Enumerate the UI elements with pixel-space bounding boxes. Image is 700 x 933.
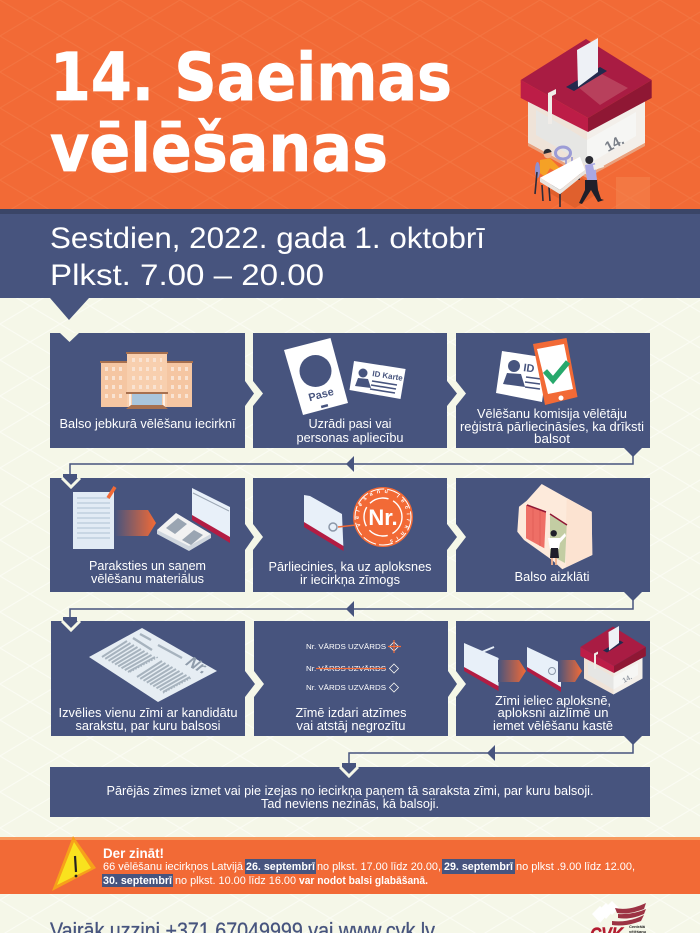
notice text: no plkst. 17.00 līdz 20.00, (317, 861, 441, 873)
arrow: gradient (558, 660, 582, 682)
step 7 panel: choose a list: sarakstu, par kuru balsosi (76, 719, 220, 733)
notice text: 29. septembrī (444, 861, 514, 873)
step 8 text: Zīmē izdari atzīmes (296, 706, 406, 720)
notice heading: Der zināt! (103, 846, 164, 861)
title: 14. Saeimas (50, 39, 452, 116)
step 9 panel: envelope into ballot box (456, 621, 650, 736)
notice text: var nodot balsi glabāšanā. (299, 875, 428, 887)
notice text (102, 859, 635, 887)
arrow: step 5 to 6 (447, 524, 466, 550)
icon: warning triangle (52, 836, 96, 891)
candidate rows with marks (306, 640, 401, 692)
logo: CVK (590, 901, 647, 933)
step 3 panel: commission checks the register: balsot (534, 432, 571, 446)
connector: row 2 to row 3 (63, 592, 642, 621)
step 9 text: Zīmi ieliec aploksnē, (495, 694, 611, 708)
step 3 text: Vēlēšanu komisija vēlētāju (477, 407, 627, 421)
step 4 panel: sign and receive materials: vēlēšanu materiālus (91, 572, 204, 586)
icon: passport: Pase (307, 386, 335, 404)
step 9 panel: envelope into ballot box: aploksni aizlīmē un (498, 706, 608, 720)
step 9 panel: envelope into ballot box: iemet vēlēšanu kastē (493, 719, 613, 733)
date and time banner (0, 209, 700, 320)
step 2 text: Uzrādi pasi vai (308, 417, 392, 431)
notice band (0, 836, 700, 894)
icon: small ballot box (580, 626, 646, 694)
icon: polling station building (100, 352, 193, 409)
step 5 panel: check the stamp (253, 478, 447, 592)
icon: ID card (496, 351, 548, 402)
step 3 panel: commission checks the register: reģistrā pārliecināsies, ka drīksti (460, 420, 644, 434)
step 5 panel: check the stamp: ir iecirkņa zīmogs (300, 573, 400, 587)
date and time banner: Sestdien, 2022. gada 1. oktobrī (50, 222, 486, 255)
notice text: no plkst .9.00 līdz 12.00, (516, 861, 635, 873)
arrow: step 7 to 8 (245, 671, 264, 697)
final note panel: Tad neviens nezinās, kā balsoji. (261, 797, 439, 811)
icon: stamp magnifier: Nr. (368, 505, 398, 530)
icon: passport (284, 338, 348, 415)
candidate rows with marks: Nr. VĀRDS UZVĀRDS (306, 665, 386, 673)
step 5 text: Pārliecinies, ka uz aploksnes (268, 560, 432, 574)
notice text: 30. septembrī (103, 875, 173, 887)
step 6 panel: vote in private (456, 478, 650, 592)
arrow: step 2 to 3 (447, 381, 466, 406)
icon: stamp magnifier: vēlēšanu iecirknis (356, 490, 410, 543)
step 2 panel: show passport or ID: personas apliecību (296, 431, 404, 445)
header panel (0, 0, 700, 209)
final note panel (50, 767, 650, 817)
arrow: gradient (115, 510, 156, 536)
candidate rows with marks: Nr. VĀRDS UZVĀRDS (306, 684, 386, 692)
illustration: ballot box with election staff (521, 38, 652, 208)
arrow: gradient (498, 660, 526, 682)
arrow: step 4 to 5 (245, 524, 263, 550)
icon: ID card: ID (523, 362, 535, 376)
icon: ballots and envelope (157, 488, 230, 551)
step 8 panel: mark candidates: vai atstāj negrozītu (296, 719, 406, 733)
step 1 text: Balso jebkurā vēlēšanu iecirknī (60, 417, 236, 431)
icon: ID card: ID Karte (372, 369, 404, 383)
icon: small ballot box: 14. (622, 674, 634, 685)
icon: sealed envelope (527, 647, 561, 692)
illustration: ballot box with election staff: 14. (602, 131, 627, 155)
connector: row 3 to final note (342, 736, 642, 767)
step 7 text: Izvēlies vienu zīmi ar kandidātu (58, 706, 238, 720)
notice text: no plkst. 10.00 līdz 16.00 (175, 875, 296, 887)
icon: candidate list sheet: Nr. (181, 654, 215, 677)
connector: row 1 to row 2 (63, 448, 642, 478)
candidate rows with marks: Nr. VĀRDS UZVĀRDS (306, 643, 386, 651)
arrow: step 1 to 2 (245, 381, 263, 406)
date and time banner: Plkst. 7.00 – 20.00 (50, 259, 324, 292)
step 2 panel: show passport or ID (253, 333, 447, 448)
title: vēlēšanas (50, 110, 388, 187)
step 4 text: Paraksties un saņem (89, 559, 206, 573)
arrow: step 8 to 9 (448, 671, 466, 697)
final note panel: Pārējās zīmes izmet vai pie izejas no iecirkņa paņem tā saraksta zīmi, par kuru balsoji. (106, 784, 594, 798)
step 1 panel: vote at any polling station (50, 333, 245, 448)
notice text: 66 vēlēšanu iecirkņos Latvijā (103, 861, 244, 873)
icon: voting booth (517, 484, 592, 569)
logo: CVK: Centrālā (629, 924, 646, 929)
step 4 panel: sign and receive materials (50, 478, 245, 592)
step 7 panel: choose a list (51, 621, 245, 736)
step 3 panel: commission checks the register (456, 333, 650, 448)
icon: ID card (350, 361, 406, 399)
step 8 panel: mark candidates (254, 621, 448, 736)
notice text: 26. septembrī (246, 861, 316, 873)
icon: signed register (73, 487, 115, 549)
step 6 text: Balso aizklāti (514, 570, 590, 584)
icon: open envelope (464, 643, 498, 691)
icon: phone with check mark (533, 338, 578, 405)
title (50, 39, 452, 187)
icon: envelope with stamp (304, 495, 356, 551)
icon: candidate list sheet (89, 628, 217, 702)
